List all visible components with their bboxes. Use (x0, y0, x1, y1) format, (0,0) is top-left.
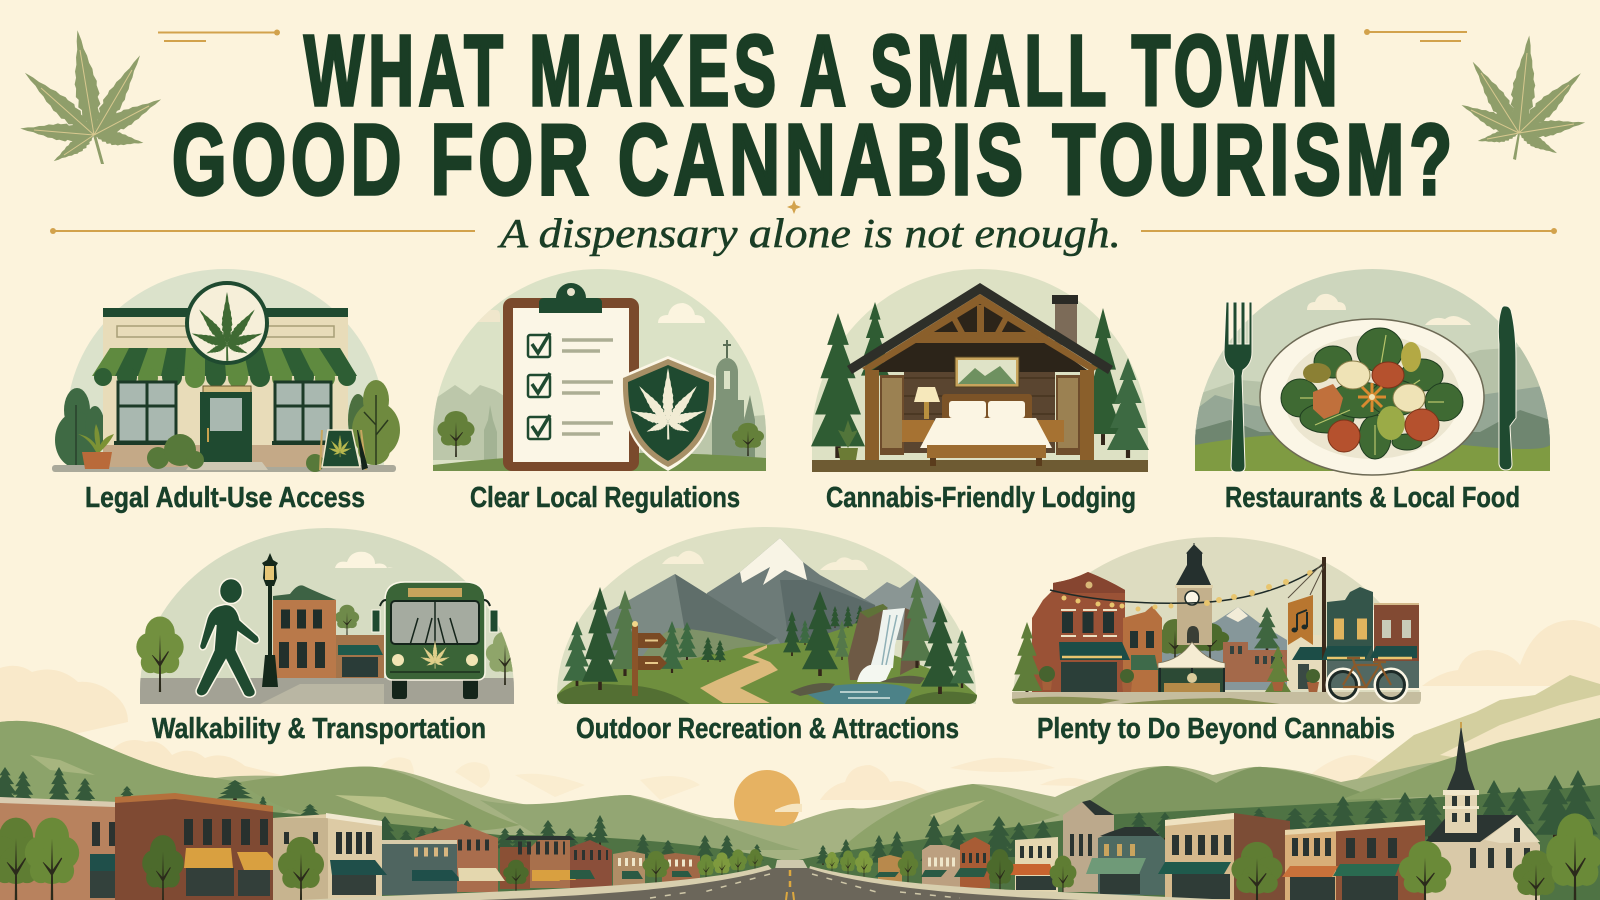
pine forest (563, 587, 865, 690)
bus (372, 582, 498, 699)
shield (621, 356, 716, 471)
trail sign (632, 621, 667, 696)
music banner (1288, 595, 1313, 645)
dome backdrop (67, 269, 384, 471)
meadow (557, 620, 977, 704)
label: walkability and transportation: Walkability & Transportation (152, 713, 486, 745)
landscape background (0, 620, 1600, 900)
main mountain (706, 538, 874, 644)
panel: cannabis-friendly lodging (811, 269, 1149, 472)
dome backdrop with hills (1195, 269, 1550, 472)
pedestrian (196, 578, 259, 697)
plant pot (78, 424, 114, 469)
dome backdrop (140, 528, 524, 704)
pines (811, 302, 1149, 458)
trees in front of right row (825, 813, 1600, 900)
hill shading (0, 721, 296, 820)
tree line left (0, 767, 764, 865)
trail (700, 645, 778, 703)
subtitle: A dispensary alone is not enough. (497, 210, 1121, 256)
trees (136, 605, 359, 692)
left window (114, 382, 180, 445)
trees (437, 411, 764, 457)
clouds (662, 551, 868, 570)
green and brown buildings right (1292, 587, 1419, 689)
bushes (147, 434, 324, 472)
main hill silhouette (0, 718, 1600, 900)
foreground pines (901, 578, 974, 694)
dome backdrop with skyline (433, 269, 766, 472)
small back peaks (863, 575, 940, 640)
brick building (273, 585, 384, 678)
main street town row: left side (0, 793, 763, 900)
flanking trees (55, 380, 400, 468)
panel: outdoor recreation and attractions (557, 527, 977, 704)
label: restaurants and local food: Restaurants & Local Food (1225, 482, 1520, 514)
title ornaments (50, 29, 1557, 234)
trees in front of left row (0, 818, 763, 900)
distant mountains (1162, 607, 1287, 690)
dome backdrop (812, 269, 1148, 472)
potted trees (1012, 622, 1320, 697)
pole (1288, 557, 1326, 693)
cloud (658, 303, 705, 323)
green base band (0, 785, 1600, 900)
label: plenty to do beyond cannabis: Plenty to Do Beyond Cannabis (1037, 713, 1395, 745)
oval cannabis sign (187, 283, 267, 363)
panel: clear local regulations (433, 269, 766, 472)
church (1425, 815, 1540, 900)
back wall (904, 343, 1055, 453)
tree line right (816, 770, 1598, 865)
roof (847, 283, 1113, 374)
ground (1012, 692, 1421, 704)
right window rows (928, 845, 1400, 862)
door (186, 386, 268, 470)
a-frame sign (320, 430, 368, 470)
far window rows (414, 845, 696, 863)
road and sidewalks (300, 860, 1234, 900)
potted plant (838, 420, 858, 460)
ground (812, 460, 1148, 472)
label: outdoor recreation and attractions: Outdoor Recreation & Attractions (576, 713, 959, 745)
framed picture (955, 357, 1019, 387)
salad (1281, 328, 1463, 459)
label: clear local regulations: Clear Local Regulations (470, 482, 740, 514)
waterfall cliff (790, 604, 925, 704)
dome backdrop with mountains (557, 527, 976, 704)
sun (734, 770, 800, 836)
panel: restaurants and local food (1195, 269, 1550, 475)
brick buildings left (1032, 572, 1162, 692)
posts (865, 370, 1094, 460)
dome backdrop (1013, 537, 1420, 704)
label: cannabis-friendly lodging: Cannabis-Friendly Lodging (826, 482, 1136, 514)
festival tent (1158, 642, 1225, 697)
main street town row: right side (825, 722, 1600, 900)
fork (1224, 302, 1252, 472)
sky clouds (0, 620, 1600, 800)
nightstands (902, 420, 1064, 442)
lamp (914, 387, 940, 419)
title (172, 15, 1457, 216)
lamp post (262, 553, 278, 687)
ground (52, 465, 396, 472)
cream building behind banner (1288, 635, 1324, 690)
right cannabis leaf (1458, 34, 1588, 160)
left mountain (590, 574, 790, 660)
panel: legal adult-use access (52, 269, 400, 472)
cloud (335, 552, 393, 568)
bed (920, 394, 1052, 466)
clock tower (1175, 543, 1213, 645)
left cannabis leaf (18, 28, 165, 167)
gable (870, 295, 1090, 372)
chimney (1052, 295, 1078, 345)
building 3 (273, 814, 382, 900)
building (103, 316, 348, 467)
string lights (1050, 564, 1324, 612)
small lane shops (1223, 642, 1287, 682)
panel: plenty to do beyond cannabis (1012, 537, 1421, 704)
clipboard (503, 283, 639, 471)
awning (92, 348, 357, 388)
green foothill (643, 628, 769, 661)
right window (272, 382, 335, 445)
pale far right hills (1330, 675, 1600, 830)
far storefront awnings (412, 870, 462, 881)
right awnings (1006, 864, 1054, 875)
checklist (528, 333, 613, 439)
panel: walkability and transportation (136, 528, 524, 704)
plate (1260, 319, 1484, 475)
far small buildings (662, 853, 700, 885)
building 1 (0, 800, 143, 900)
bicycle (1327, 658, 1407, 701)
knife (1498, 306, 1516, 470)
building 2 (115, 794, 273, 900)
label: legal adult-use access: Legal Adult-Use Access (85, 482, 365, 514)
